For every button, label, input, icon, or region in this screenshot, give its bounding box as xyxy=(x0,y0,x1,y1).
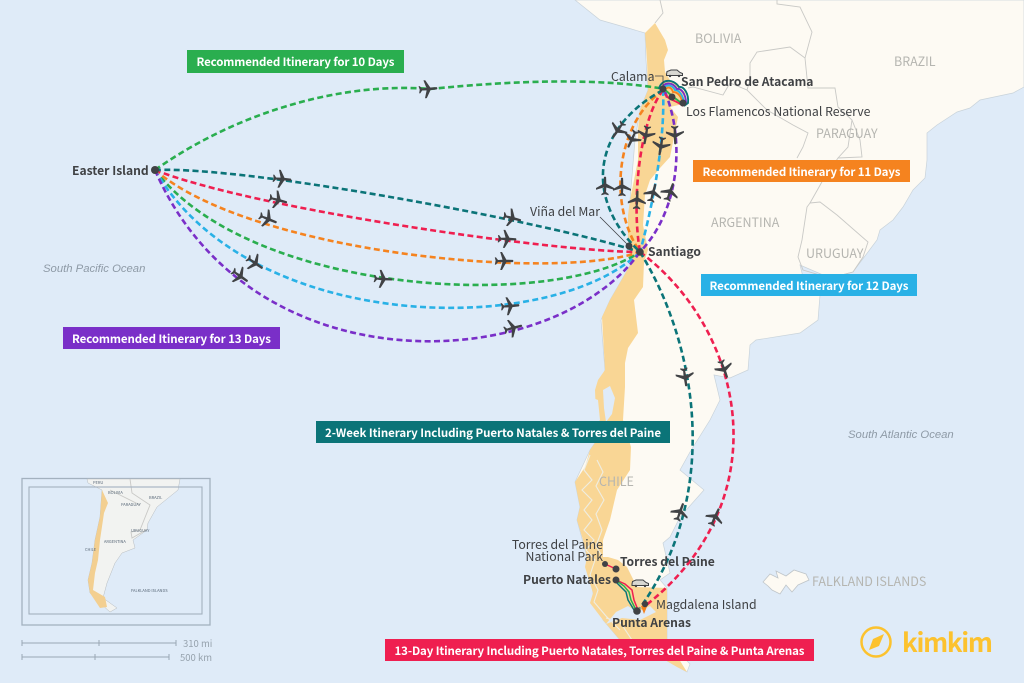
place labels: Los Flamencos National Reserve xyxy=(686,102,871,120)
place labels: San Pedro de Atacama xyxy=(681,73,813,90)
route: teal xyxy=(155,90,695,608)
Chile islands texture xyxy=(582,455,668,660)
Patagonia road routes xyxy=(605,564,638,610)
route: 11 days orange xyxy=(155,90,663,270)
ocean label: Atlantic: South Atlantic Ocean xyxy=(848,429,954,441)
ocean label: Pacific: South Pacific Ocean xyxy=(43,263,145,275)
land: South America xyxy=(575,0,1024,672)
label: 2 week xyxy=(316,421,670,443)
inset map: BRAZIL xyxy=(149,495,163,501)
inset map: CHILE xyxy=(85,547,97,553)
label: 13 days: Recommended Itinerary for 13 Days xyxy=(72,331,271,347)
leader lines xyxy=(600,76,663,246)
country labels: BRAZIL xyxy=(894,51,936,70)
country labels: FALKLAND ISLANDS xyxy=(812,571,926,590)
label: 13 day Punta Arenas: 13-Day Itinerary Including Puerto Natales, Torres del Paine & Punta Arenas xyxy=(394,643,805,659)
icon: car Patagonia xyxy=(632,580,648,587)
place labels: National Park xyxy=(526,547,603,565)
label: 10 days: Recommended Itinerary for 10 Days xyxy=(196,54,395,70)
label: 13 day Punta Arenas xyxy=(385,639,814,661)
Magdalena Island marker xyxy=(641,604,648,614)
place labels: Punta Arenas xyxy=(612,614,691,631)
place labels: Magdalena Island xyxy=(656,595,757,613)
sounds and straits xyxy=(592,386,656,624)
inset map: FALKLAND ISLANDS xyxy=(131,588,168,594)
country labels: ARGENTINA xyxy=(711,212,780,231)
label: 11 days xyxy=(693,160,910,182)
country borders xyxy=(655,0,868,278)
label: 12 days xyxy=(701,274,917,296)
scale bars xyxy=(22,636,212,664)
Atacama loops xyxy=(659,81,688,106)
country labels: BOLIVIA xyxy=(695,28,742,47)
country labels: CHILE xyxy=(599,471,634,490)
label: 12 days: Recommended Itinerary for 12 Days xyxy=(710,278,909,294)
route: 12 days light blue xyxy=(155,90,671,316)
label: 13 days xyxy=(63,327,280,349)
place labels: Viña del Mar xyxy=(530,202,600,220)
scale bars: 500 km xyxy=(180,650,212,664)
label: 2 week: 2-Week Itinerary Including Puerto Natales & Torres del Paine xyxy=(325,425,661,441)
inset map xyxy=(22,478,210,625)
inset map: ARGENTINA xyxy=(104,539,126,545)
inset map: PARAGUAY xyxy=(121,502,142,508)
place labels: Puerto Natales xyxy=(523,571,611,588)
region: Chile xyxy=(575,23,687,672)
place labels: Torres del Paine xyxy=(512,535,603,553)
inset map: URUGUAY xyxy=(131,528,150,534)
country labels xyxy=(599,28,936,590)
scale bars: 310 mi xyxy=(183,636,212,650)
route: 10 days green xyxy=(155,79,665,288)
route: 13 days purple xyxy=(155,92,684,341)
Falkland Islands xyxy=(763,570,809,594)
inset map: PERU xyxy=(93,480,103,486)
place labels: Santiago xyxy=(648,243,701,260)
country labels: PARAGUAY xyxy=(816,123,878,142)
inset map: BOLIVIA xyxy=(108,490,123,496)
logo: kimkim: kimkim xyxy=(902,623,993,660)
logo: kimkim xyxy=(862,623,993,660)
icon: car Atacama xyxy=(666,70,682,77)
place labels: Torres del Paine xyxy=(620,553,715,570)
place labels xyxy=(72,67,871,631)
label: 11 days: Recommended Itinerary for 11 Days xyxy=(702,164,901,180)
place dots xyxy=(151,86,686,615)
place labels: Easter Island xyxy=(72,162,149,179)
country labels: URUGUAY xyxy=(806,243,864,262)
label: 10 days xyxy=(187,50,404,73)
route: red xyxy=(155,90,736,606)
place labels: Calama xyxy=(611,67,654,85)
